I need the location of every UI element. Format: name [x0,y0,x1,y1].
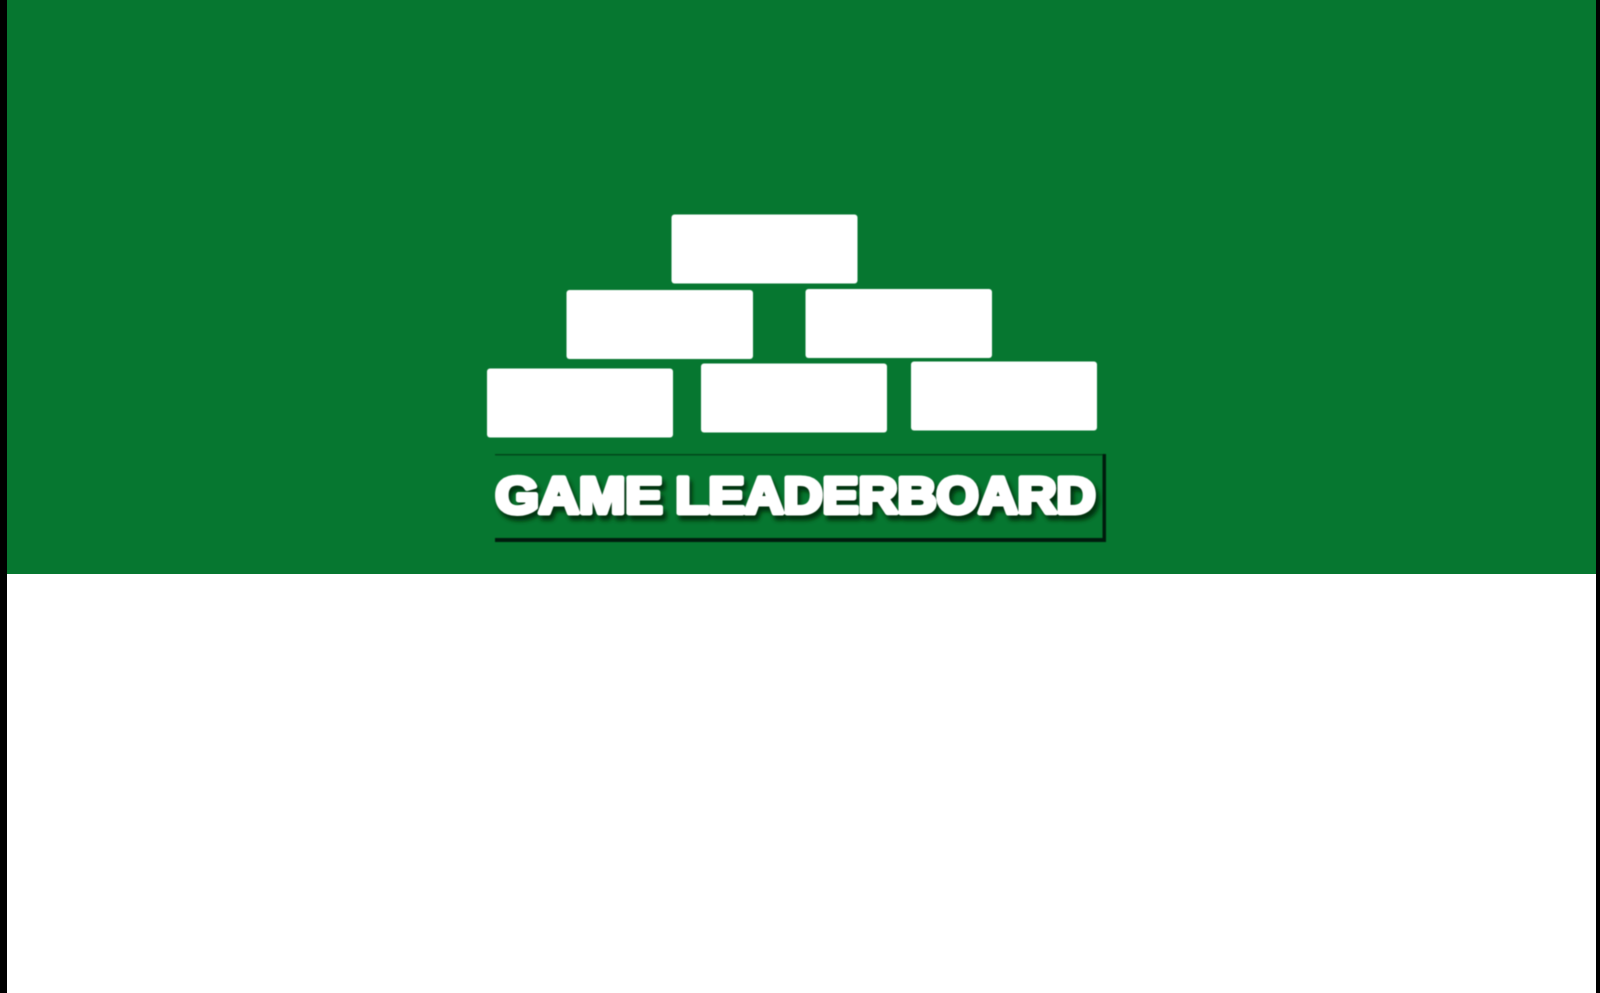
title: GAME [496,467,662,524]
green header band [7,0,1596,574]
right black edge [1596,0,1600,993]
title shadow: LEADERBOARD [678,472,1099,529]
left black edge [0,0,7,993]
title shadow [498,472,1099,529]
title: LEADERBOARD [676,467,1096,524]
title box frame [495,454,1106,542]
title [496,467,1096,524]
brick pyramid icon [487,214,1097,438]
title box [495,454,1106,542]
title shadow: GAME [498,472,666,529]
